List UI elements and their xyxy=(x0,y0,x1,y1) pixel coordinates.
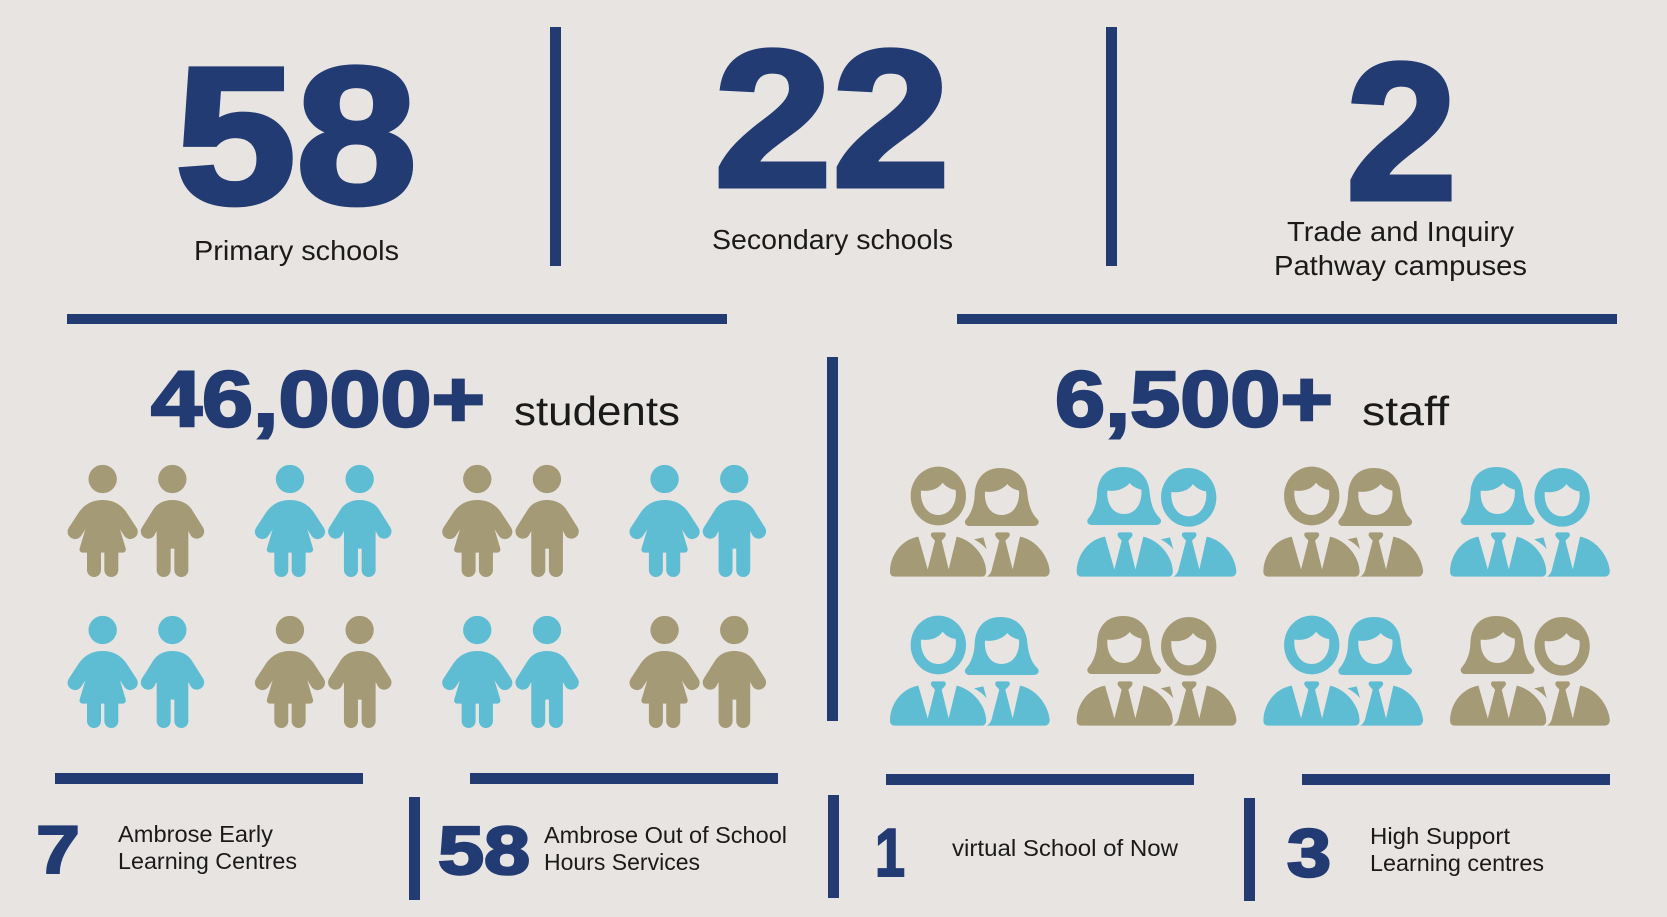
divider xyxy=(550,27,561,266)
label: primary schools: Primary schools xyxy=(194,235,399,266)
label: secondary schools: Secondary schools xyxy=(712,224,953,255)
number 7: 7 xyxy=(36,812,80,888)
number 1: 1 xyxy=(875,815,905,891)
label line 1: Ambrose Early xyxy=(118,821,273,847)
rule right xyxy=(957,314,1617,324)
number 2: 2 xyxy=(1346,23,1457,241)
icon: children tan xyxy=(442,465,579,577)
icon: children blue xyxy=(442,616,579,728)
icon: children blue xyxy=(255,465,391,577)
icon: children tan xyxy=(68,465,204,577)
centre divider xyxy=(827,357,838,721)
icon: staff blue xyxy=(1450,467,1610,577)
staff heading number: 6,500+ xyxy=(1055,354,1333,443)
icon: children blue xyxy=(68,616,204,728)
icon: children tan xyxy=(629,616,766,728)
label: trade and inquiry line 1: Trade and Inquiry xyxy=(1287,216,1514,247)
icon: staff blue xyxy=(1077,467,1236,577)
label line 2: Learning Centres xyxy=(118,848,297,874)
label: trade and inquiry line 2: Pathway campuses xyxy=(1274,250,1527,281)
rule above out of school xyxy=(470,773,778,784)
divider xyxy=(1106,27,1117,266)
divider xyxy=(1244,798,1255,901)
label: virtual School of Now xyxy=(952,835,1179,861)
icon: staff tan xyxy=(1450,616,1610,726)
stat: out of school hours services xyxy=(438,813,787,889)
divider xyxy=(828,795,839,898)
rule left xyxy=(67,314,727,324)
stat: early learning centres xyxy=(36,812,297,888)
staff heading label: staff xyxy=(1362,388,1450,434)
number 58: 58 xyxy=(438,813,530,889)
stat: primary schools xyxy=(175,27,417,266)
label line 1: High Support xyxy=(1370,823,1510,849)
number 3: 3 xyxy=(1287,815,1331,891)
students heading label: students xyxy=(514,388,680,434)
rule above high support xyxy=(1302,774,1610,785)
label line 1: Ambrose Out of School xyxy=(544,822,787,848)
icon: staff tan xyxy=(890,467,1050,577)
stat: secondary schools xyxy=(712,10,953,255)
icon: staff tan xyxy=(1077,616,1236,726)
icon: children blue xyxy=(629,465,766,577)
stat: trade and inquiry campuses xyxy=(1274,23,1527,281)
icon: staff tan xyxy=(1263,467,1423,577)
rule above early learning xyxy=(55,773,363,784)
number 22: 22 xyxy=(714,10,950,228)
students heading number: 46,000+ xyxy=(151,354,485,443)
panel: staff xyxy=(890,354,1610,726)
icon: staff blue xyxy=(890,616,1050,726)
stat: virtual school of now xyxy=(875,815,1179,891)
number 58: 58 xyxy=(175,27,417,245)
label line 2: Hours Services xyxy=(544,849,700,875)
label line 2: Learning centres xyxy=(1370,850,1544,876)
panel: students xyxy=(68,354,766,728)
divider xyxy=(409,797,420,900)
icon: staff blue xyxy=(1263,616,1423,726)
rule above school of now xyxy=(886,774,1194,785)
icon: children tan xyxy=(255,616,391,728)
stat: high support learning centres xyxy=(1287,815,1544,891)
